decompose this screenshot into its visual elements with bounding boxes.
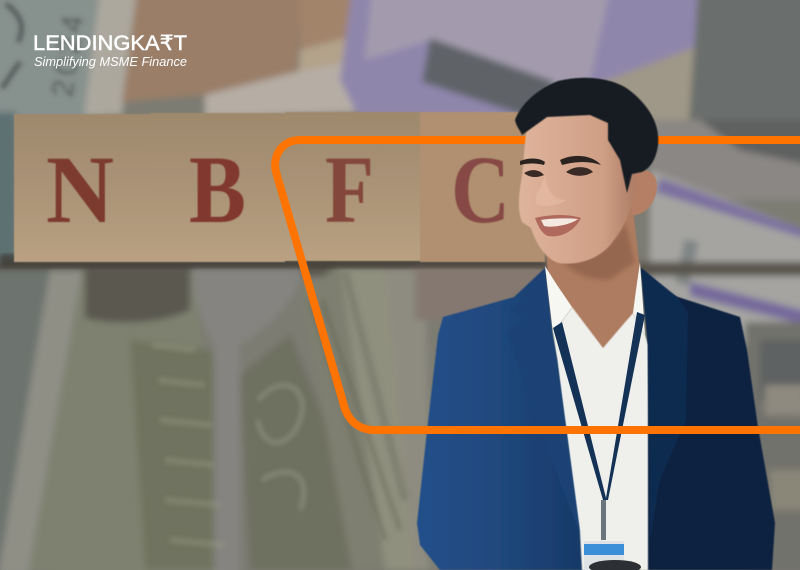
mouth	[535, 215, 581, 236]
block letters	[46, 136, 510, 243]
banknote details: 2024	[46, 8, 91, 99]
top band	[0, 0, 105, 120]
ear	[630, 170, 657, 215]
orange outline behind the head	[275, 140, 800, 430]
nose	[535, 175, 567, 206]
neck	[545, 200, 640, 350]
man in a navy suit	[417, 78, 775, 570]
eyes	[524, 167, 593, 177]
bottom band	[0, 262, 800, 276]
wordmark: LENDINGKA₹T	[33, 32, 187, 55]
left lapel	[507, 270, 580, 533]
block letters: F	[325, 136, 374, 243]
right lapel	[641, 268, 688, 540]
face	[519, 105, 640, 264]
jacket left	[417, 268, 582, 570]
shirt collar	[545, 262, 645, 335]
id badge	[584, 500, 641, 570]
block N	[14, 114, 150, 262]
block letters: N	[46, 136, 114, 243]
brand logo	[33, 32, 187, 69]
teeth	[541, 218, 578, 227]
block letters: B	[189, 136, 246, 243]
block letters: C	[451, 136, 510, 243]
orange line across the suit	[375, 426, 800, 434]
wooden NBFC blocks	[0, 112, 545, 268]
banknote details	[2, 4, 405, 545]
right side	[650, 120, 800, 200]
shirt	[553, 307, 650, 570]
tagline: Simplifying MSME Finance	[34, 55, 187, 69]
block C	[420, 112, 545, 262]
block F	[285, 112, 420, 261]
jacket right	[641, 268, 775, 570]
eyebrows	[520, 156, 601, 165]
lanyard	[553, 312, 645, 500]
hair	[515, 78, 658, 193]
block B	[150, 113, 285, 262]
